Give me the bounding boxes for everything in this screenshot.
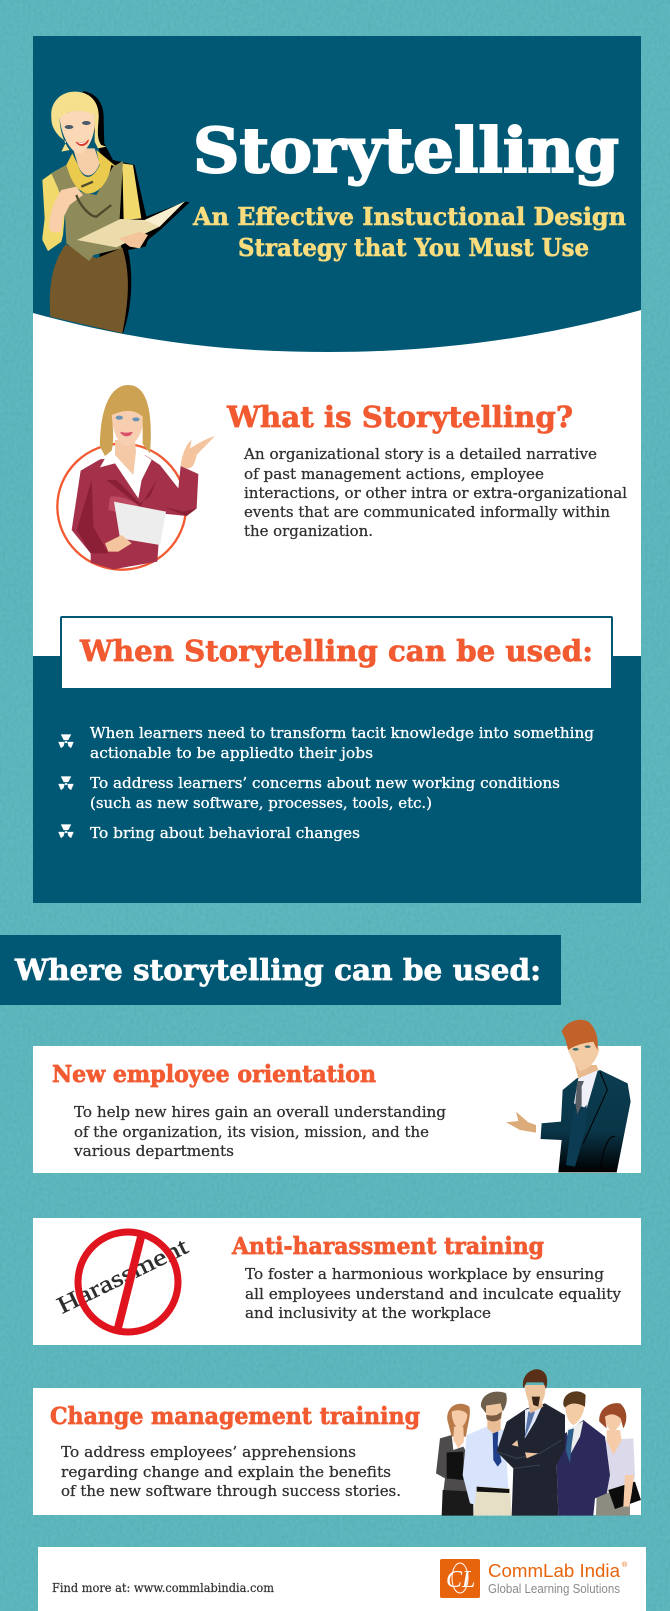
subtitle — [192, 202, 626, 262]
panel: change management training: Change management training — [50, 1403, 420, 1430]
text block: orientation: various departments — [73, 1144, 234, 1160]
panel: anti-harassment training: Anti-harassment training — [231, 1233, 544, 1260]
logo: CommLab India: ® — [622, 1561, 628, 1569]
text block: definition: An organizational story is a detailed narrative — [243, 447, 597, 463]
text block: anti-harassment: and inclusivity at the workplace — [245, 1306, 491, 1322]
footer panel: Find more at: www.commlabindia.com — [52, 1581, 275, 1595]
text block: definition: of past management actions, employee — [244, 467, 544, 483]
banner: Where storytelling can be used — [0, 935, 561, 1005]
text block: definition: events that are communicated informally within — [244, 505, 610, 521]
text block: orientation: of the organization, its vision, mission, and the — [74, 1125, 429, 1141]
footer panel — [38, 1547, 646, 1611]
panel: new employee orientation: New employee orientation — [52, 1061, 376, 1088]
logo: CommLab India — [440, 1559, 628, 1598]
heading box: When Storytelling can be used — [61, 617, 612, 688]
icon: no harassment sign — [53, 1232, 193, 1332]
heading: What is Storytelling: What is Storytelling? — [226, 400, 573, 434]
bullet 2 — [58, 776, 74, 790]
list: when storytelling can be used: To bring about behavioral changes — [90, 826, 360, 842]
text block: change management: of the new software through success stories. — [61, 1484, 401, 1500]
text block: orientation — [73, 1105, 446, 1160]
heading box: When Storytelling can be used: When Storytelling can be used: — [79, 634, 593, 668]
illustration: blonde woman with book — [42, 91, 190, 333]
text block: change management — [61, 1445, 401, 1500]
text block: change management: To address employees’ apprehensions — [61, 1445, 356, 1461]
panel: new employee orientation — [33, 1020, 641, 1173]
list: when storytelling can be used: actionable to be appliedto their jobs — [90, 746, 373, 762]
panel: change management training — [33, 1369, 641, 1516]
logo: CommLab India: CL — [446, 1567, 475, 1593]
illustration: man in suit — [506, 1020, 631, 1172]
text block: orientation: To help new hires gain an overall understanding — [74, 1105, 446, 1121]
bullet 1 — [58, 734, 74, 748]
text block: definition: the organization. — [244, 524, 373, 540]
title: Storytelling — [193, 114, 619, 187]
white curved section — [33, 310, 641, 656]
text block: definition — [243, 447, 627, 540]
list: when storytelling can be used: (such as new software, processes, tools, etc.) — [90, 796, 432, 812]
logo: CommLab India: CommLab India — [488, 1561, 621, 1581]
list: when storytelling can be used: To address learners’ concerns about new working conditions — [90, 776, 560, 792]
illustration: woman in red jacket in circle — [57, 385, 215, 570]
icon: no harassment sign: Harassment — [53, 1234, 193, 1319]
illustration: group of five professionals — [436, 1369, 641, 1516]
list: when storytelling can be used: When learners need to transform tacit knowledge into something — [90, 726, 594, 742]
list: when storytelling can be used — [58, 726, 594, 842]
banner: Where storytelling can be used: Where storytelling can be used: — [14, 953, 541, 987]
text block: anti-harassment: all employees understand and inculcate equality — [245, 1287, 622, 1303]
bullet 3 — [58, 824, 74, 838]
panel: anti-harassment training — [33, 1218, 641, 1345]
text block: anti-harassment: To foster a harmonious workplace by ensuring — [245, 1267, 604, 1283]
text block: change management: regarding change and explain the benefits — [61, 1465, 391, 1481]
subtitle: Strategy that You Must Use — [238, 233, 589, 262]
text block: definition: interactions, or other intra or extra-organizational — [244, 486, 627, 502]
subtitle: An Effective Instuctional Design — [192, 202, 626, 231]
logo: CommLab India: Global Learning Solutions — [488, 1582, 620, 1596]
panel: header and intro — [33, 36, 641, 903]
text block: anti-harassment — [245, 1267, 622, 1322]
